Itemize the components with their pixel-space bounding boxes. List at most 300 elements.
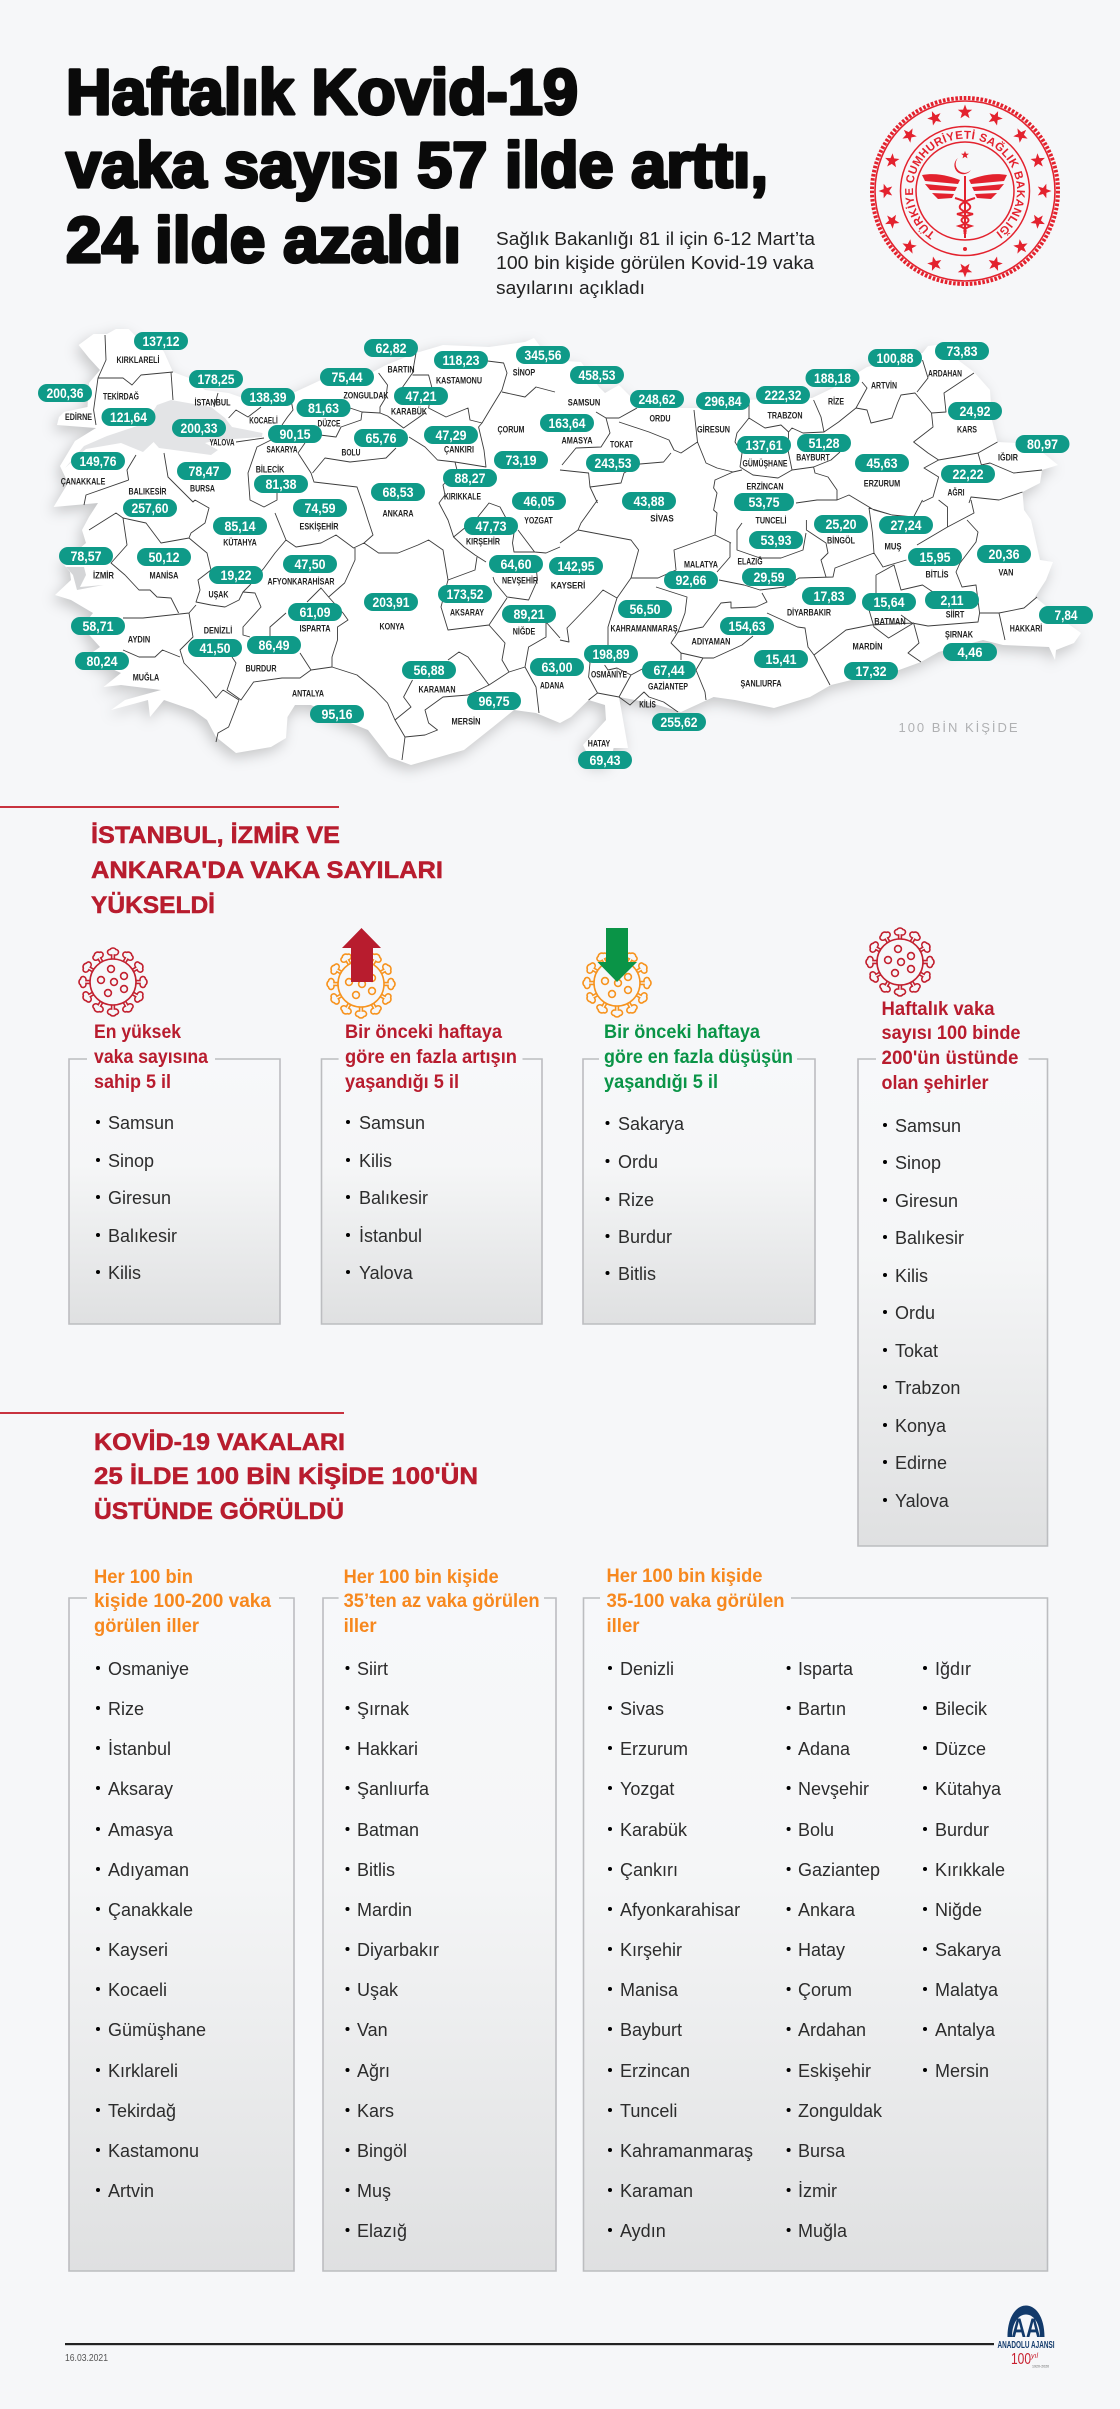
province: Aydın: AYDIN — [128, 634, 150, 646]
province: Muş — [879, 516, 933, 552]
province: Adana: 63,00 — [542, 659, 573, 675]
sea of Marmara — [65, 400, 262, 468]
province: Amasya — [540, 414, 594, 446]
province: Bitlis: 15,95 — [920, 549, 951, 565]
province: Şanlıurfa: ŞANLIURFA — [740, 678, 782, 690]
province: Amasya: AMASYA — [562, 436, 593, 446]
list column 2: İzmir — [798, 2181, 837, 2201]
logo: Anadolu Ajansı: 100 — [1011, 2351, 1031, 2368]
province: Ağrı: 22,22 — [952, 466, 984, 482]
province: Samsun: 458,53 — [578, 367, 616, 383]
list: Kocaeli — [108, 1980, 167, 2000]
province: Batman — [862, 593, 916, 628]
land outline — [54, 329, 1081, 765]
province: Çanakkale — [61, 452, 125, 488]
heading: section 1: İSTANBUL, İZMİR VE — [91, 822, 340, 849]
list: İstanbul — [359, 1226, 422, 1246]
province: Antalya: ANTALYA — [292, 688, 324, 700]
list column 2: Bartın — [798, 1699, 846, 1719]
province: Siirt — [925, 591, 979, 620]
province: Muş: MUŞ — [884, 542, 902, 552]
province: Gaziantep: GAZİANTEP — [648, 682, 688, 692]
list: Kilis — [895, 1266, 928, 1286]
province: Bursa: 78,47 — [188, 463, 220, 479]
list column 1: Kahramanmaraş — [620, 2141, 753, 2161]
list: Kilis — [359, 1151, 392, 1171]
icon: virus orange with down arrow — [583, 928, 651, 1017]
province: Hatay — [578, 738, 632, 769]
list: Siirt — [357, 1659, 388, 1679]
province: Gaziantep: 67,44 — [654, 662, 685, 678]
list: Mardin — [357, 1900, 412, 1920]
province: Bingöl — [814, 515, 868, 546]
province: Diyarbakır: 17,83 — [814, 588, 845, 604]
province: Gümüşhane: GÜMÜŞHANE — [742, 458, 788, 470]
panel heading: Bir önceki haftaya — [345, 1022, 502, 1043]
logo: Anadolu Ajansı: AA — [1012, 2313, 1040, 2343]
province: Ankara — [371, 483, 425, 520]
panel heading: sahip 5 il — [94, 1072, 171, 1093]
list column 2: Ardahan — [798, 2020, 866, 2040]
province: Ankara: ANKARA — [382, 508, 414, 520]
panel heading: yaşandığı 5 il — [604, 1072, 718, 1093]
heading: section 2: 25 İLDE 100 BİN KİŞİDE 100'ÜN — [94, 1463, 478, 1490]
province: Kilis — [639, 700, 706, 731]
province: Konya: KONYA — [380, 622, 405, 632]
province: Manisa: 50,12 — [148, 549, 180, 565]
province: Karaman: KARAMAN — [418, 684, 456, 696]
province borders — [84, 335, 560, 760]
province: Malatya: MALATYA — [684, 560, 718, 570]
list column 2: Bursa — [798, 2141, 846, 2161]
province: Osmaniye: OSMANİYE — [591, 670, 627, 680]
panel: 100-200 cases — [69, 1567, 294, 2271]
list: Rize — [108, 1699, 144, 1719]
province: Kırıkkale: KIRIKKALE — [444, 492, 481, 502]
province: Gümüşhane: 137,61 — [746, 437, 783, 453]
province: Giresun: GİRESUN — [697, 424, 730, 436]
province: Yozgat: 46,05 — [524, 493, 555, 509]
section 1 rule — [0, 806, 339, 808]
panel heading — [94, 1022, 208, 1093]
panel: biggest rise — [322, 1022, 542, 1324]
province: Burdur: 86,49 — [258, 637, 290, 653]
panel heading: Bir önceki haftaya — [604, 1022, 760, 1043]
logo: Anadolu Ajansı — [998, 2306, 1055, 2368]
map unit caption: 100 BİN KİŞİDE — [898, 720, 1018, 735]
province: Kastamonu: KASTAMONU — [436, 376, 482, 386]
province: Sakarya: SAKARYA — [266, 444, 298, 456]
list column 3: Iğdır — [935, 1659, 971, 1679]
province: Hakkari — [1010, 606, 1093, 634]
list column 3: Kütahya — [935, 1779, 1002, 1799]
province: Samsun — [568, 366, 624, 408]
province: Konya — [364, 593, 418, 632]
province: Afyonkarahisar: 47,50 — [294, 556, 326, 572]
province: Erzurum — [855, 454, 909, 490]
list column 1: Aydın — [620, 2221, 666, 2241]
province: Kırşehir — [464, 517, 518, 548]
list: Konya — [895, 1416, 947, 1436]
province: Yalova: 200,33 — [180, 420, 218, 436]
panel heading: Haftalık vaka — [882, 999, 995, 1020]
province: İzmir: İZMİR — [93, 570, 114, 582]
subtitle: Sağlık Bakanlığı 81 il için 6-12 Mart’ta — [496, 229, 816, 249]
province: Niğde: NİĞDE — [513, 626, 535, 638]
panel heading: 35-100 vaka görülen — [606, 1591, 784, 1612]
province: Elazığ — [738, 556, 796, 586]
list: Kırklareli — [108, 2061, 178, 2081]
province: Gaziantep — [642, 661, 696, 692]
province: Diyarbakır: DİYARBAKIR — [787, 608, 831, 618]
panel: weekly cases above 200 — [858, 999, 1048, 1546]
province: Zonguldak — [320, 368, 389, 402]
province: Muş: 27,24 — [890, 517, 922, 533]
list column 3 — [923, 1659, 1005, 2081]
list: Kastamonu — [108, 2141, 199, 2161]
list: Kilis — [108, 1263, 141, 1283]
panel heading: En yüksek — [94, 1022, 181, 1043]
province: İstanbul: İSTANBUL — [194, 398, 231, 408]
list column 2: Muğla — [798, 2221, 848, 2241]
province: Trabzon: 222,32 — [764, 387, 802, 403]
list: Bitlis — [357, 1860, 395, 1880]
panel heading: Her 100 bin kişide — [344, 1567, 499, 1588]
list: Artvin — [108, 2181, 154, 2201]
list column 2: Zonguldak — [798, 2101, 883, 2121]
subtitle: 100 bin kişide görülen Kovid-19 vaka — [496, 253, 815, 273]
logo: Anadolu Ajansı: ANADOLU AJANSI — [998, 2340, 1055, 2351]
panel: highest cases — [69, 1022, 280, 1324]
province: Isparta: 61,09 — [300, 604, 331, 620]
province: Kilis: KİLİS — [639, 700, 656, 710]
province: Bartın: 62,82 — [376, 340, 407, 356]
list column 1: Manisa — [620, 1980, 679, 2000]
list: Samsun — [108, 1113, 174, 1133]
province: Giresun — [696, 392, 750, 436]
province: Şanlıurfa — [740, 650, 808, 690]
province: Bayburt: BAYBURT — [796, 452, 830, 464]
list column 3: Sakarya — [935, 1940, 1002, 1960]
icon: ministry of health seal: TÜRKİYE CUMHURİYETİ SAĞLIK BAKANLIĞI — [905, 129, 1025, 240]
panel heading: Her 100 bin — [94, 1567, 193, 1588]
province: Bolu: BOLU — [342, 448, 361, 458]
province: Uşak: 19,22 — [220, 567, 252, 583]
province: Bitlis: BİTLİS — [926, 570, 948, 580]
panel heading: 200'ün üstünde — [882, 1048, 1018, 1069]
province: Trabzon: TRABZON — [768, 410, 803, 422]
panel heading — [345, 1022, 517, 1093]
list: Samsun — [895, 1116, 961, 1136]
province: Diyarbakır — [787, 587, 856, 618]
list column 2 — [787, 1659, 883, 2241]
province: Tokat: TOKAT — [610, 440, 633, 450]
list: Adıyaman — [108, 1860, 189, 1880]
list column 1: Yozgat — [620, 1779, 674, 1799]
province: Kars: KARS — [957, 424, 977, 436]
list: Edirne — [895, 1453, 947, 1473]
province: Mersin — [452, 692, 521, 728]
province: Bartın: BARTIN — [388, 364, 415, 376]
list: Şırnak — [357, 1699, 410, 1719]
province: Yalova: YALOVA — [210, 438, 235, 448]
list: Osmaniye — [108, 1659, 189, 1679]
province: Eskişehir: ESKİŞEHİR — [300, 522, 339, 532]
province: Bolu: 65,76 — [366, 430, 397, 446]
province: Erzincan — [734, 482, 794, 511]
province: Şırnak: 4,46 — [958, 644, 983, 660]
province: Isparta: ISPARTA — [300, 624, 331, 634]
list: Yalova — [895, 1491, 950, 1511]
list column 1: Erzurum — [620, 1739, 688, 1759]
list column 2: Isparta — [798, 1659, 854, 1679]
panel: 35-100 cases — [584, 1566, 1048, 2271]
province: Nevşehir: NEVŞEHİR — [502, 576, 538, 586]
title: vaka sayısı 57 ilde arttı, — [66, 129, 768, 201]
province: Ankara: 68,53 — [382, 484, 414, 500]
list: Sinop — [895, 1153, 941, 1173]
list column 1: Afyonkarahisar — [620, 1900, 740, 1920]
province: Hatay: HATAY — [588, 738, 611, 750]
province: Balıkesir — [123, 486, 177, 517]
province: Çorum: 73,19 — [506, 452, 537, 468]
panel heading: yaşandığı 5 il — [345, 1072, 459, 1093]
panel heading: göre en fazla artışın — [345, 1047, 517, 1068]
province: Bingöl: 25,20 — [826, 516, 857, 532]
province: Bayburt: 51,28 — [808, 435, 840, 451]
province: Siirt: 2,11 — [940, 592, 964, 608]
province: Ordu — [630, 390, 684, 424]
province: Bingöl: BİNGÖL — [827, 536, 855, 546]
title: 24 ilde azaldı — [66, 204, 461, 276]
list: Trabzon — [895, 1378, 960, 1398]
province: Sakarya: 90,15 — [280, 426, 311, 442]
list column 1: Karabük — [620, 1820, 688, 1840]
list column 1: Bayburt — [620, 2020, 682, 2040]
province: Bayburt — [796, 434, 851, 464]
province: Van — [977, 545, 1031, 578]
panel heading: olan şehirler — [882, 1073, 989, 1094]
province: Yozgat: YOZGAT — [524, 516, 553, 526]
list column 3: Kırıkkale — [935, 1860, 1005, 1880]
list column 2: Gaziantep — [798, 1860, 880, 1880]
section 2 rule — [0, 1412, 344, 1414]
province: Bursa: BURSA — [190, 484, 215, 494]
province: Sinop — [513, 346, 570, 378]
province: Sakarya — [266, 425, 322, 456]
title — [66, 56, 768, 276]
province: Samsun: SAMSUN — [568, 398, 600, 408]
heading: section 1 — [91, 822, 443, 919]
province: Ordu: 248,62 — [638, 391, 676, 407]
province: Ağrı — [941, 465, 995, 498]
list column 1 — [608, 1659, 753, 2241]
province: Kayseri: 142,95 — [558, 558, 595, 574]
list column 1: Erzincan — [620, 2061, 690, 2081]
icon: virus red — [79, 948, 147, 1016]
list column 3: Antalya — [935, 2020, 996, 2040]
province: Zonguldak: ZONGULDAK — [344, 390, 389, 402]
logo: Anadolu Ajansı: 1920-2020 — [1032, 2364, 1049, 2368]
province: Kocaeli: KOCAELİ — [249, 416, 278, 426]
province: Burdur — [246, 636, 301, 674]
province: İzmir: 78,57 — [70, 548, 102, 564]
panel heading — [344, 1567, 540, 1637]
province: Adana: ADANA — [540, 680, 564, 692]
panel heading: iller — [606, 1616, 640, 1637]
province: Şırnak: ŞIRNAK — [945, 630, 973, 640]
province: Batman: BATMAN — [874, 616, 906, 628]
province: Yalova — [172, 419, 235, 448]
list column 2: Adana — [798, 1739, 851, 1759]
province: Uşak — [208, 566, 263, 600]
province: Adıyaman: ADIYAMAN — [692, 636, 731, 648]
province: Artvin: 100,88 — [876, 350, 914, 366]
panel heading — [606, 1566, 784, 1637]
province: Eskişehir — [293, 499, 347, 532]
list column 1: Tunceli — [620, 2101, 677, 2121]
panel heading — [94, 1567, 271, 1637]
list — [346, 1113, 428, 1283]
province: Kırıkkale: 88,27 — [454, 470, 486, 486]
province: Kırklareli: KIRKLARELİ — [116, 355, 160, 366]
list: Balıkesir — [895, 1228, 964, 1248]
panel heading: görülen iller — [94, 1616, 200, 1637]
list column 3: Bilecik — [935, 1699, 988, 1719]
province: Denizli: 41,50 — [200, 640, 231, 656]
panel: biggest fall — [583, 1022, 815, 1324]
province: Çorum: ÇORUM — [498, 424, 525, 436]
panel heading — [882, 999, 1020, 1094]
heading: section 2: KOVİD-19 VAKALARI — [94, 1429, 345, 1456]
province: İstanbul — [189, 370, 243, 408]
panel heading: göre en fazla düşüşün — [604, 1047, 793, 1068]
province: Ardahan: ARDAHAN — [928, 368, 962, 380]
province: Yozgat — [512, 492, 566, 526]
province: Artvin — [868, 349, 922, 392]
province: Kahramanmaraş: 56,50 — [630, 601, 661, 617]
list — [883, 1116, 964, 1511]
list: Hakkari — [357, 1739, 418, 1759]
province: Van: VAN — [998, 568, 1014, 578]
province: Kahramanmaraş: KAHRAMANMARAŞ — [610, 624, 678, 634]
province: Tekirdağ: TEKİRDAĞ — [103, 390, 139, 402]
list column 3: Düzce — [935, 1739, 986, 1759]
province: Kütahya: KÜTAHYA — [223, 538, 257, 548]
province: Iğdır — [998, 435, 1070, 464]
panel heading: vaka sayısına — [94, 1047, 208, 1068]
province: Şırnak — [943, 630, 997, 661]
province: Çankırı: ÇANKIRI — [444, 444, 474, 456]
province: Balıkesir: 257,60 — [132, 500, 169, 516]
list: Batman — [357, 1820, 419, 1840]
list: Yalova — [359, 1263, 414, 1283]
province: Osmaniye — [584, 645, 638, 680]
province: Kırşehir: KIRŞEHİR — [466, 536, 500, 548]
province: Ardahan — [928, 342, 989, 380]
list column 1: Kırşehir — [620, 1940, 682, 1960]
province: Erzurum: ERZURUM — [864, 478, 900, 490]
list: Gümüşhane — [108, 2020, 206, 2040]
list: Giresun — [108, 1188, 171, 1208]
subtitle: sayılarını açıkladı — [496, 278, 645, 298]
province: Düzce — [296, 399, 350, 430]
province: İzmir — [59, 547, 114, 582]
list: Sinop — [108, 1151, 154, 1171]
province: Şanlıurfa: 15,41 — [766, 651, 797, 667]
list: Aksaray — [108, 1779, 173, 1799]
province: Denizli: DENİZLİ — [204, 626, 232, 636]
list: Kayseri — [108, 1940, 168, 1960]
list: Giresun — [895, 1191, 958, 1211]
province: Kilis: 255,62 — [660, 714, 698, 730]
province: Amasya: 163,64 — [548, 415, 586, 431]
province: Tunceli: TUNCELİ — [756, 516, 786, 526]
province: Düzce: DÜZCE — [318, 418, 340, 430]
province: Edirne: 200,36 — [46, 385, 84, 401]
province: Bilecik — [254, 464, 308, 493]
province: Aksaray: AKSARAY — [450, 608, 484, 618]
province: Antalya: 95,16 — [322, 706, 353, 722]
province: Kayseri: KAYSERİ — [551, 580, 585, 592]
province: Denizli — [188, 626, 242, 657]
province: Rize: 188,18 — [814, 370, 851, 386]
panel heading: Her 100 bin kişide — [606, 1566, 762, 1587]
province: Çankırı: 47,29 — [436, 427, 467, 443]
list column 2: Hatay — [798, 1940, 845, 1960]
province: Isparta — [288, 603, 342, 634]
province: Tokat — [586, 440, 640, 472]
province: Kars: 24,92 — [960, 403, 991, 419]
province: Rize — [806, 369, 860, 408]
list column 1: Denizli — [620, 1659, 674, 1679]
province: Balıkesir: BALIKESİR — [128, 486, 167, 498]
province: Aksaray: 173,52 — [446, 586, 484, 602]
list column 1: Karaman — [620, 2181, 693, 2201]
province: Ardahan: 73,83 — [946, 343, 978, 359]
province: Iğdır: 80,97 — [1027, 436, 1058, 452]
list: Samsun — [359, 1113, 425, 1133]
province: Çorum — [494, 424, 548, 469]
province: Kırıkkale — [443, 469, 497, 502]
province: Kocaeli: 138,39 — [250, 389, 287, 405]
list column 3: Burdur — [935, 1820, 989, 1840]
province: Iğdır: IĞDIR — [998, 452, 1018, 464]
province: Çankırı — [424, 426, 478, 456]
province: Adıyaman — [692, 617, 774, 648]
province: Mersin: MERSİN — [452, 716, 481, 728]
province: Burdur: BURDUR — [246, 664, 277, 674]
list column 3: Mersin — [935, 2061, 989, 2081]
province: Ordu: ORDU — [650, 414, 671, 424]
province: Eskişehir: 74,59 — [304, 500, 336, 516]
province: Aydın: 58,71 — [82, 618, 114, 634]
province: Manisa — [137, 548, 191, 582]
province: Edirne: EDİRNE — [65, 412, 92, 423]
province: Karabük: 47,21 — [406, 388, 437, 404]
province: Tunceli: 53,93 — [760, 532, 792, 548]
list: Sakarya — [618, 1114, 685, 1134]
province: Kahramanmaraş — [610, 600, 678, 634]
province: Bitlis — [908, 548, 962, 580]
province: Edirne — [38, 384, 92, 423]
province: Karabük — [391, 387, 448, 418]
province: Karabük: KARABÜK — [391, 406, 427, 418]
list: Şanlıurfa — [357, 1779, 430, 1799]
title: Haftalık Kovid-19 — [66, 56, 578, 128]
list: Bitlis — [618, 1264, 656, 1284]
list: Ordu — [618, 1152, 658, 1172]
